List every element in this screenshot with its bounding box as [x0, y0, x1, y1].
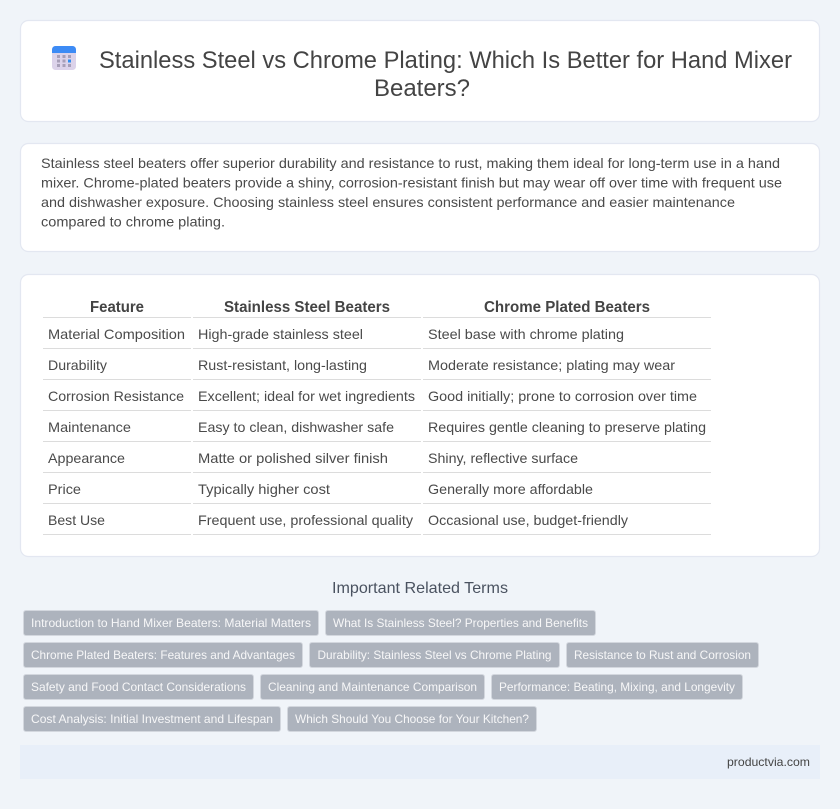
footer bar: [20, 745, 820, 779]
chip: Durability: Stainless Steel vs Chrome Plating: [318, 648, 552, 662]
chip: Cleaning and Maintenance Comparison: [268, 680, 477, 694]
panel: title header: [20, 20, 820, 122]
panel: comparison table: [20, 274, 820, 556]
row: best use: [48, 512, 628, 528]
row: appearance: Shiny, reflective surface: [428, 450, 578, 466]
chip: [24, 674, 254, 700]
text block: summary: [41, 155, 782, 230]
chip: Safety and Food Contact Considerations: [31, 680, 246, 694]
chip: Which Should You Choose for Your Kitchen?: [295, 712, 529, 726]
table header: Stainless Steel Beaters: [224, 299, 390, 316]
row: maintenance: Maintenance: [48, 419, 131, 435]
chip: [24, 642, 302, 668]
row: appearance: [48, 450, 578, 466]
row: appearance: Matte or polished silver finish: [198, 450, 388, 466]
chip: [492, 674, 742, 700]
row: best use: Occasional use, budget-friendly: [428, 512, 628, 528]
title: Stainless Steel vs Chrome Plating: Which Is Better for Hand Mixer: [99, 47, 792, 74]
row: material composition: Material Composition: [48, 326, 185, 342]
row: maintenance: Easy to clean, dishwasher safe: [198, 419, 394, 435]
row: best use: Frequent use, professional quality: [198, 512, 413, 528]
row: corrosion resistance: Good initially; prone to corrosion over time: [428, 388, 697, 404]
row: price: [48, 481, 593, 497]
row: material composition: High-grade stainless steel: [198, 326, 363, 342]
row: durability: Moderate resistance; plating may wear: [428, 357, 675, 373]
row: durability: Rust-resistant, long-lasting: [198, 357, 367, 373]
row: durability: Durability: [48, 357, 107, 373]
text block: summary: and dishwasher exposure. Choosing stainless steel ensures consistent performance and easier maintenance: [41, 194, 735, 210]
table header: Feature: [90, 299, 144, 316]
table header: [90, 299, 650, 316]
chip: [260, 674, 484, 700]
heading: important related terms: Important Related Terms: [332, 580, 508, 597]
chip: Performance: Beating, Mixing, and Longevity: [499, 680, 735, 694]
chip: [310, 642, 560, 668]
row: corrosion resistance: Corrosion Resistance: [48, 388, 184, 404]
title: Beaters?: [374, 75, 470, 102]
row: material composition: Steel base with chrome plating: [428, 326, 624, 342]
chip: [288, 706, 536, 732]
related terms chips: [24, 610, 758, 732]
text block: summary: compared to chrome plating.: [41, 214, 225, 230]
title: [99, 47, 792, 102]
chip: Introduction to Hand Mixer Beaters: Material Matters: [31, 616, 311, 630]
row: material composition: [48, 326, 624, 342]
row: maintenance: Requires gentle cleaning to preserve plating: [428, 419, 706, 435]
chip: [326, 610, 596, 636]
chip: Cost Analysis: Initial Investment and Lifespan: [31, 712, 273, 726]
chip: [24, 610, 318, 636]
text block: summary: mixer. Chrome-plated beaters provide a shiny, corrosion-resistant finish but may wear off over time with frequent use: [41, 174, 782, 190]
row: corrosion resistance: Excellent; ideal for wet ingredients: [198, 388, 415, 404]
row: corrosion resistance: [48, 388, 697, 404]
row: price: Price: [48, 481, 81, 497]
icon: calendar grid: [52, 46, 76, 70]
row: maintenance: [48, 419, 706, 435]
panel: summary paragraph: [20, 144, 820, 252]
chip: Chrome Plated Beaters: Features and Advantages: [31, 648, 295, 662]
table header: Chrome Plated Beaters: [484, 299, 650, 316]
row: price: Typically higher cost: [198, 481, 330, 497]
chip: [566, 642, 758, 668]
footer source: productvia.com: [727, 755, 810, 769]
chip: Resistance to Rust and Corrosion: [574, 648, 751, 662]
text block: summary: Stainless steel beaters offer superior durability and resistance to rust, making them ideal for long-term use in a hand: [41, 155, 780, 171]
chip: What Is Stainless Steel? Properties and Benefits: [333, 616, 588, 630]
row: best use: Best Use: [48, 512, 105, 528]
chip: [24, 706, 280, 732]
row: durability: [48, 357, 675, 373]
row: appearance: Appearance: [48, 450, 125, 466]
row: price: Generally more affordable: [428, 481, 593, 497]
